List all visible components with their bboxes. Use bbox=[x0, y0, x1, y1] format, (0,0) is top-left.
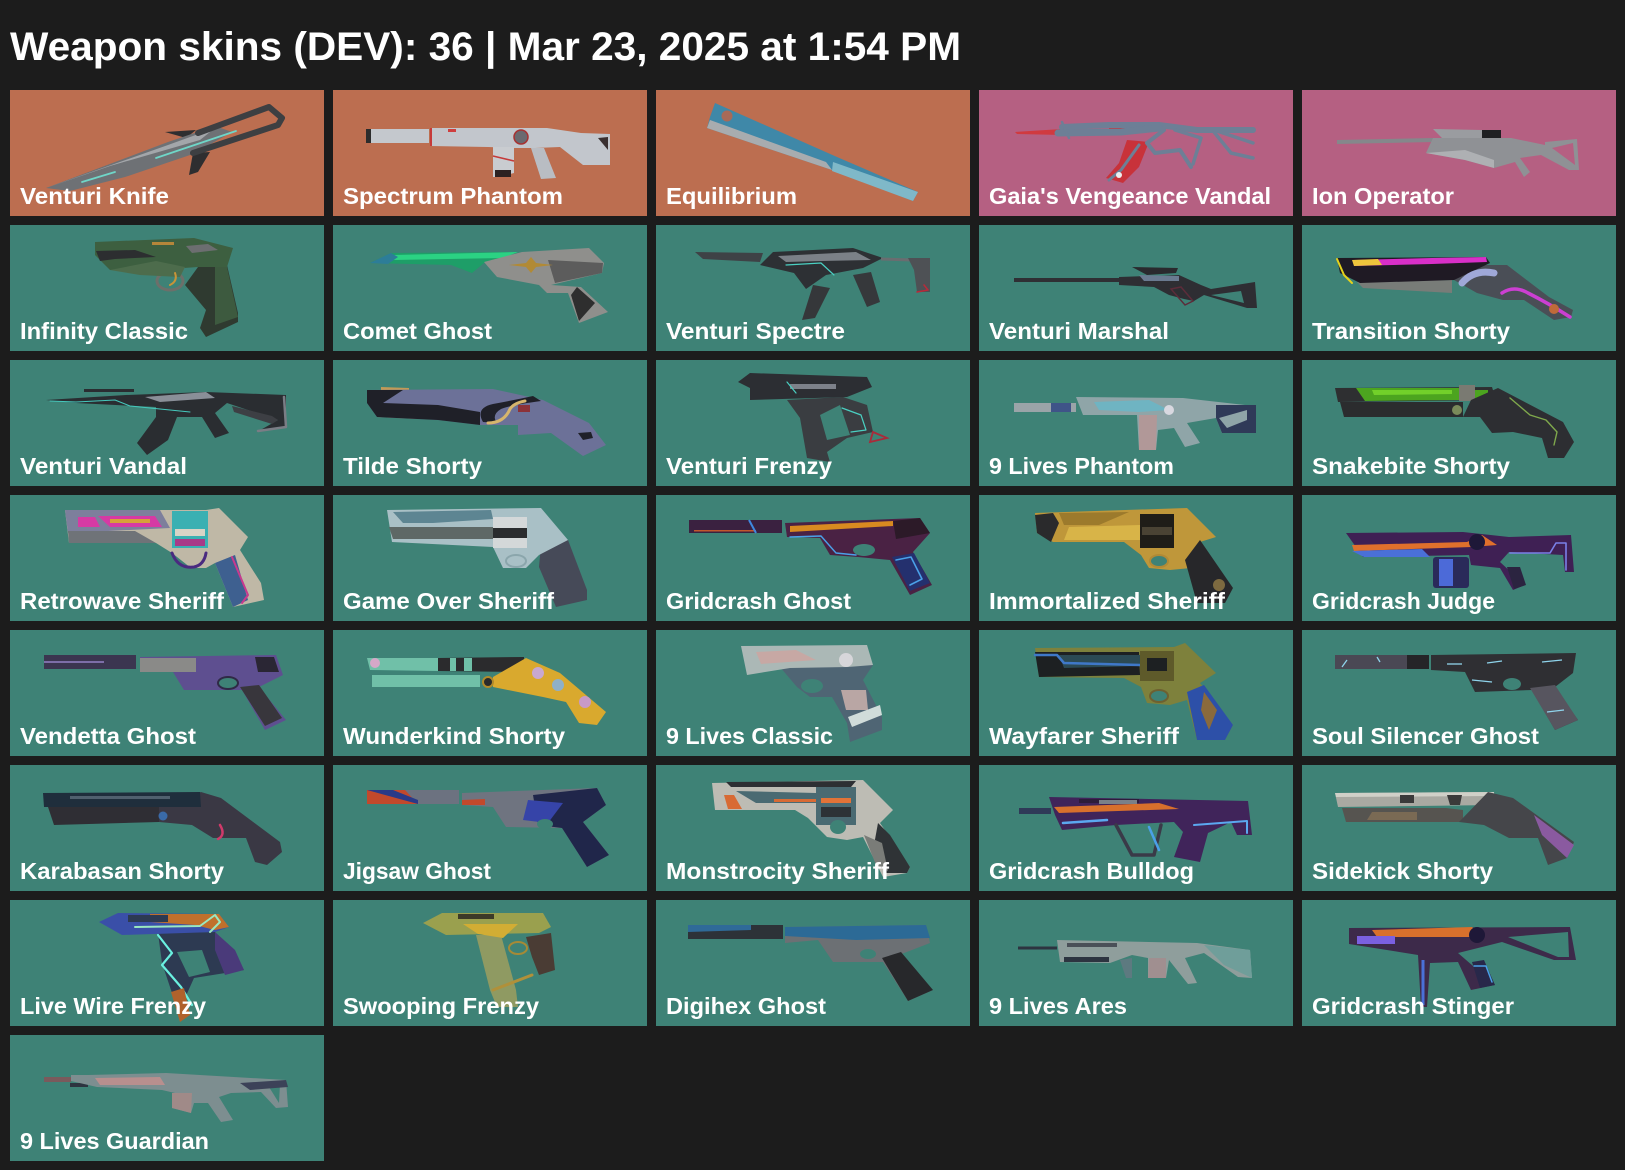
card: Equilibrium bbox=[656, 90, 970, 216]
card: Tilde Shorty bbox=[333, 360, 647, 486]
label: 9 Lives Ares bbox=[989, 993, 1127, 1019]
card: Vendetta Ghost bbox=[10, 630, 324, 756]
icon: Gridcrash Stinger bbox=[1349, 927, 1576, 1007]
card: Gridcrash Ghost bbox=[656, 495, 970, 621]
card: Gaia's Vengeance Vandal bbox=[979, 90, 1293, 216]
icon: Swooping Frenzy bbox=[423, 913, 555, 1007]
icon: Digihex Ghost bbox=[688, 925, 933, 1001]
card: Transition Shorty bbox=[1302, 225, 1616, 351]
label: Equilibrium bbox=[666, 183, 797, 209]
icon: Jigsaw Ghost bbox=[367, 788, 609, 867]
icon: Karabasan Shorty bbox=[43, 792, 282, 865]
icon: 9 Lives Phantom bbox=[1014, 397, 1256, 450]
icon: Immortalized Sheriff bbox=[1035, 508, 1233, 603]
card: Karabasan Shorty bbox=[10, 765, 324, 891]
card: Gridcrash Stinger bbox=[1302, 900, 1616, 1026]
icon: Venturi Vandal bbox=[46, 389, 286, 455]
label: Comet Ghost bbox=[343, 318, 492, 344]
label: Tilde Shorty bbox=[343, 453, 482, 479]
icon: Wayfarer Sheriff bbox=[1035, 643, 1233, 740]
card: 9 Lives Phantom bbox=[979, 360, 1293, 486]
icon: Spectrum Phantom bbox=[366, 128, 610, 179]
icon: Vendetta Ghost bbox=[44, 655, 286, 730]
icon: Ion Operator bbox=[1337, 129, 1579, 177]
label: Infinity Classic bbox=[20, 318, 188, 344]
card: Wunderkind Shorty bbox=[333, 630, 647, 756]
label: Snakebite Shorty bbox=[1312, 453, 1510, 479]
card: Ion Operator bbox=[1302, 90, 1616, 216]
card: Wayfarer Sheriff bbox=[979, 630, 1293, 756]
icon: Gridcrash Judge bbox=[1346, 532, 1574, 590]
icon: Retrowave Sheriff bbox=[65, 508, 264, 607]
card: Swooping Frenzy bbox=[333, 900, 647, 1026]
card: Snakebite Shorty bbox=[1302, 360, 1616, 486]
icon: Tilde Shorty bbox=[367, 387, 606, 456]
icon: Venturi Frenzy bbox=[738, 373, 887, 462]
card: Soul Silencer Ghost bbox=[1302, 630, 1616, 756]
label: Wayfarer Sheriff bbox=[989, 723, 1179, 749]
card: Comet Ghost bbox=[333, 225, 647, 351]
icon: Game Over Sheriff bbox=[387, 508, 587, 607]
card: 9 Lives Classic bbox=[656, 630, 970, 756]
label: Gridcrash Judge bbox=[1312, 588, 1495, 614]
icon: Gridcrash Bulldog bbox=[1019, 797, 1252, 862]
icon: Venturi Spectre bbox=[695, 248, 930, 320]
label: Gridcrash Ghost bbox=[666, 588, 851, 614]
label: Gaia's Vengeance Vandal bbox=[989, 183, 1271, 209]
card: 9 Lives Guardian bbox=[10, 1035, 324, 1161]
label: Wunderkind Shorty bbox=[343, 723, 565, 749]
label: Gridcrash Bulldog bbox=[989, 858, 1194, 884]
card: Venturi Spectre bbox=[656, 225, 970, 351]
label: Game Over Sheriff bbox=[343, 588, 554, 614]
card: Digihex Ghost bbox=[656, 900, 970, 1026]
icon: Comet Ghost bbox=[370, 248, 608, 323]
icon: Monstrocity Sheriff bbox=[712, 780, 910, 877]
label: Live Wire Frenzy bbox=[20, 993, 206, 1019]
label: Venturi Frenzy bbox=[666, 453, 832, 479]
label: Venturi Marshal bbox=[989, 318, 1169, 344]
label: Venturi Vandal bbox=[20, 453, 187, 479]
label: Jigsaw Ghost bbox=[343, 858, 491, 884]
icon: Gridcrash Ghost bbox=[689, 518, 932, 595]
label: Immortalized Sheriff bbox=[989, 588, 1225, 614]
icon: Soul Silencer Ghost bbox=[1335, 653, 1578, 730]
card: Spectrum Phantom bbox=[333, 90, 647, 216]
card: Sidekick Shorty bbox=[1302, 765, 1616, 891]
card: Game Over Sheriff bbox=[333, 495, 647, 621]
card: Immortalized Sheriff bbox=[979, 495, 1293, 621]
card: Gridcrash Judge bbox=[1302, 495, 1616, 621]
label: Spectrum Phantom bbox=[343, 183, 563, 209]
card: Venturi Marshal bbox=[979, 225, 1293, 351]
icon: Transition Shorty bbox=[1337, 257, 1573, 320]
icon: 9 Lives Classic bbox=[741, 645, 882, 742]
card: Monstrocity Sheriff bbox=[656, 765, 970, 891]
label: Transition Shorty bbox=[1312, 318, 1510, 344]
label: Retrowave Sheriff bbox=[20, 588, 224, 614]
label: Ion Operator bbox=[1312, 183, 1454, 209]
card: Live Wire Frenzy bbox=[10, 900, 324, 1026]
label: Venturi Knife bbox=[20, 183, 169, 209]
label: Sidekick Shorty bbox=[1312, 858, 1493, 884]
label: Karabasan Shorty bbox=[20, 858, 224, 884]
icon: Equilibrium bbox=[707, 103, 918, 201]
icon: 9 Lives Guardian bbox=[44, 1073, 288, 1122]
icon: 9 Lives Ares bbox=[1018, 940, 1252, 984]
label: Swooping Frenzy bbox=[343, 993, 539, 1019]
card: Retrowave Sheriff bbox=[10, 495, 324, 621]
card: Jigsaw Ghost bbox=[333, 765, 647, 891]
card: Gridcrash Bulldog bbox=[979, 765, 1293, 891]
icon: Gaia's Vengeance Vandal bbox=[1015, 122, 1253, 183]
icon: Infinity Classic bbox=[95, 238, 238, 337]
label: 9 Lives Guardian bbox=[20, 1128, 209, 1154]
label: 9 Lives Phantom bbox=[989, 453, 1174, 479]
card: Venturi Vandal bbox=[10, 360, 324, 486]
card: Venturi Knife bbox=[10, 90, 324, 216]
label: Digihex Ghost bbox=[666, 993, 826, 1019]
label: 9 Lives Classic bbox=[666, 723, 833, 749]
icon: Venturi Knife bbox=[46, 107, 282, 191]
icon: Sidekick Shorty bbox=[1335, 792, 1574, 865]
icon: Wunderkind Shorty bbox=[367, 657, 606, 725]
title: Weapon skins (DEV): 36 | Mar 23, 2025 at 1:54 PM bbox=[10, 25, 961, 69]
icon: Snakebite Shorty bbox=[1335, 385, 1574, 458]
card: Venturi Frenzy bbox=[656, 360, 970, 486]
card: Infinity Classic bbox=[10, 225, 324, 351]
label: Gridcrash Stinger bbox=[1312, 993, 1514, 1019]
label: Soul Silencer Ghost bbox=[1312, 723, 1539, 749]
card: 9 Lives Ares bbox=[979, 900, 1293, 1026]
label: Vendetta Ghost bbox=[20, 723, 196, 749]
icon: Live Wire Frenzy bbox=[99, 913, 244, 1022]
label: Monstrocity Sheriff bbox=[666, 858, 889, 884]
label: Venturi Spectre bbox=[666, 318, 845, 344]
icon: Venturi Marshal bbox=[1014, 267, 1257, 308]
